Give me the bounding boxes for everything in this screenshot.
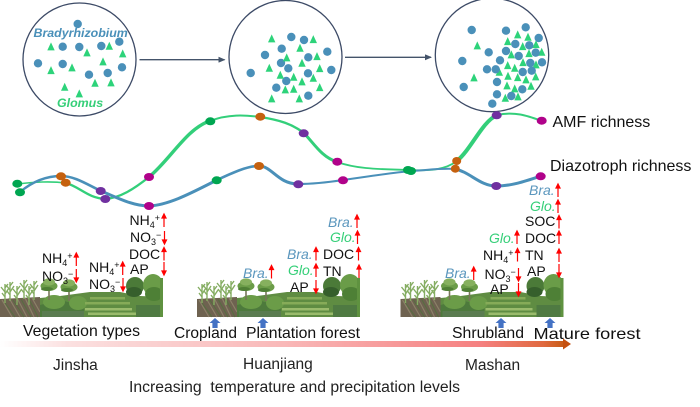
label: Mashan: Mashan	[465, 357, 520, 374]
arrow: circle 2 to circle 3	[345, 56, 431, 58]
indicators: Huanjiang mature forest: Glo.	[330, 229, 356, 245]
label: Plantation forest: Plantation forest	[246, 325, 361, 342]
indicators: Mashan shrubland: NH	[483, 247, 503, 263]
indicators: Jinsha plantation forest: NO	[42, 268, 63, 284]
indicators: Mashan shrubland: 3	[506, 274, 511, 284]
label: AMF richness: AMF richness	[552, 114, 650, 131]
indicators: Mashan shrubland: −	[511, 267, 516, 277]
indicators: Huanjiang shrubland	[287, 246, 318, 295]
indicators: Jinsha shrubland	[89, 259, 125, 294]
indicators: Jinsha plantation forest: −	[68, 269, 73, 279]
indicators: Jinsha shrubland: NO	[89, 276, 110, 292]
indicators: Huanjiang shrubland: Bra.	[287, 246, 313, 262]
indicators: Huanjiang mature forest: DOC	[323, 246, 354, 262]
chart: curve data points	[12, 111, 547, 210]
chart: AMF richness curve	[17, 114, 542, 199]
indicators: Jinsha plantation forest: 3	[63, 276, 68, 286]
indicators: Jinsha shrubland: 3	[110, 284, 115, 294]
indicators: Jinsha plantation forest: 4	[62, 258, 67, 268]
indicators: Jinsha mature forest: DOC	[129, 246, 160, 262]
circle: community at Mashan	[435, 0, 549, 112]
indicators: Huanjiang mature forest	[323, 214, 361, 279]
illustration: vegetation strip Huanjiang	[197, 274, 360, 317]
caption: Increasing temperature and precipitation levels: Increasing temperature and precipitation levels	[129, 379, 460, 396]
indicators: Huanjiang shrubland: Glo.	[288, 262, 314, 278]
label: Cropland: Cropland	[174, 325, 237, 342]
green triangles	[266, 34, 323, 102]
icon: blue arrows to vegetation types	[210, 318, 556, 328]
indicators: Mashan mature forest: Glo.	[530, 198, 556, 214]
indicators: Jinsha shrubland: NH	[89, 259, 109, 275]
label: Mature forest: Mature forest	[534, 326, 641, 343]
indicators: Mashan shrubland: +	[508, 248, 514, 258]
label: Vegetation types: Vegetation types	[23, 323, 140, 340]
label: Jinsha: Jinsha	[53, 357, 98, 374]
label: Glomus: Glomus	[57, 96, 103, 110]
indicators: Mashan mature forest: Bra.	[529, 182, 555, 198]
circle: community at Huanjiang	[229, 0, 342, 114]
indicators: Jinsha mature forest: NH	[130, 212, 150, 228]
indicators: Huanjiang mature forest: TN	[323, 263, 342, 279]
indicators: Mashan mature forest: AP	[527, 263, 546, 279]
indicators: Mashan shrubland	[483, 230, 520, 297]
indicators: Jinsha plantation forest: +	[67, 251, 73, 261]
indicators: Jinsha mature forest: −	[156, 230, 161, 240]
indicators: Jinsha plantation forest	[42, 250, 78, 286]
indicators: Mashan shrubland: 4	[503, 255, 508, 265]
indicators: Jinsha plantation forest: NH	[42, 250, 62, 266]
indicators: Jinsha shrubland: −	[115, 277, 120, 287]
label: Shrubland: Shrubland	[452, 325, 524, 342]
indicators: Jinsha mature forest: +	[155, 213, 160, 223]
indicators: Jinsha mature forest: AP	[130, 261, 149, 277]
chart: Diazotroph richness curve	[20, 166, 541, 206]
indicators: Mashan mature forest: DOC	[525, 230, 556, 246]
indicators: Mashan mature forest	[525, 182, 561, 279]
indicators: Jinsha mature forest: 3	[151, 237, 156, 247]
indicators: Mashan mature forest: TN	[525, 247, 544, 263]
indicators: Jinsha shrubland: 4	[109, 267, 114, 277]
blue dots	[458, 23, 546, 108]
blue dots	[246, 33, 335, 100]
indicators: Huanjiang plantation forest: Bra.	[243, 265, 269, 281]
indicators: Jinsha shrubland: +	[114, 260, 120, 270]
indicators: Mashan shrubland: Glo.	[489, 230, 515, 246]
indicators: Mashan shrubland: NO	[484, 266, 506, 282]
circle: Bradyrhizobium and Glomus community at Jinsha	[23, 3, 136, 116]
label: Huanjiang: Huanjiang	[243, 356, 313, 373]
arrow: circle 1 to circle 2	[140, 59, 224, 61]
indicators: Mashan plantation forest: Bra.	[445, 265, 471, 281]
indicators: Jinsha mature forest: 4	[150, 220, 155, 230]
green triangles	[47, 42, 126, 97]
label: Diazotroph richness: Diazotroph richness	[550, 158, 691, 175]
illustration: vegetation strip Mashan	[400, 274, 564, 317]
indicators: Huanjiang mature forest: Bra.	[328, 214, 354, 230]
indicators: Mashan mature forest: SOC	[525, 213, 555, 229]
arrow: gradient climate axis	[0, 338, 571, 350]
label: Bradyrhizobium: Bradyrhizobium	[34, 26, 128, 40]
indicators: Jinsha mature forest	[129, 212, 166, 277]
indicators: Jinsha mature forest: NO	[130, 229, 151, 245]
indicators: Mashan shrubland: AP	[490, 281, 509, 297]
green triangles	[470, 30, 545, 102]
illustration: vegetation strip Jinsha	[0, 274, 163, 317]
indicators: Huanjiang shrubland: AP	[290, 279, 309, 295]
blue dots	[34, 20, 126, 79]
